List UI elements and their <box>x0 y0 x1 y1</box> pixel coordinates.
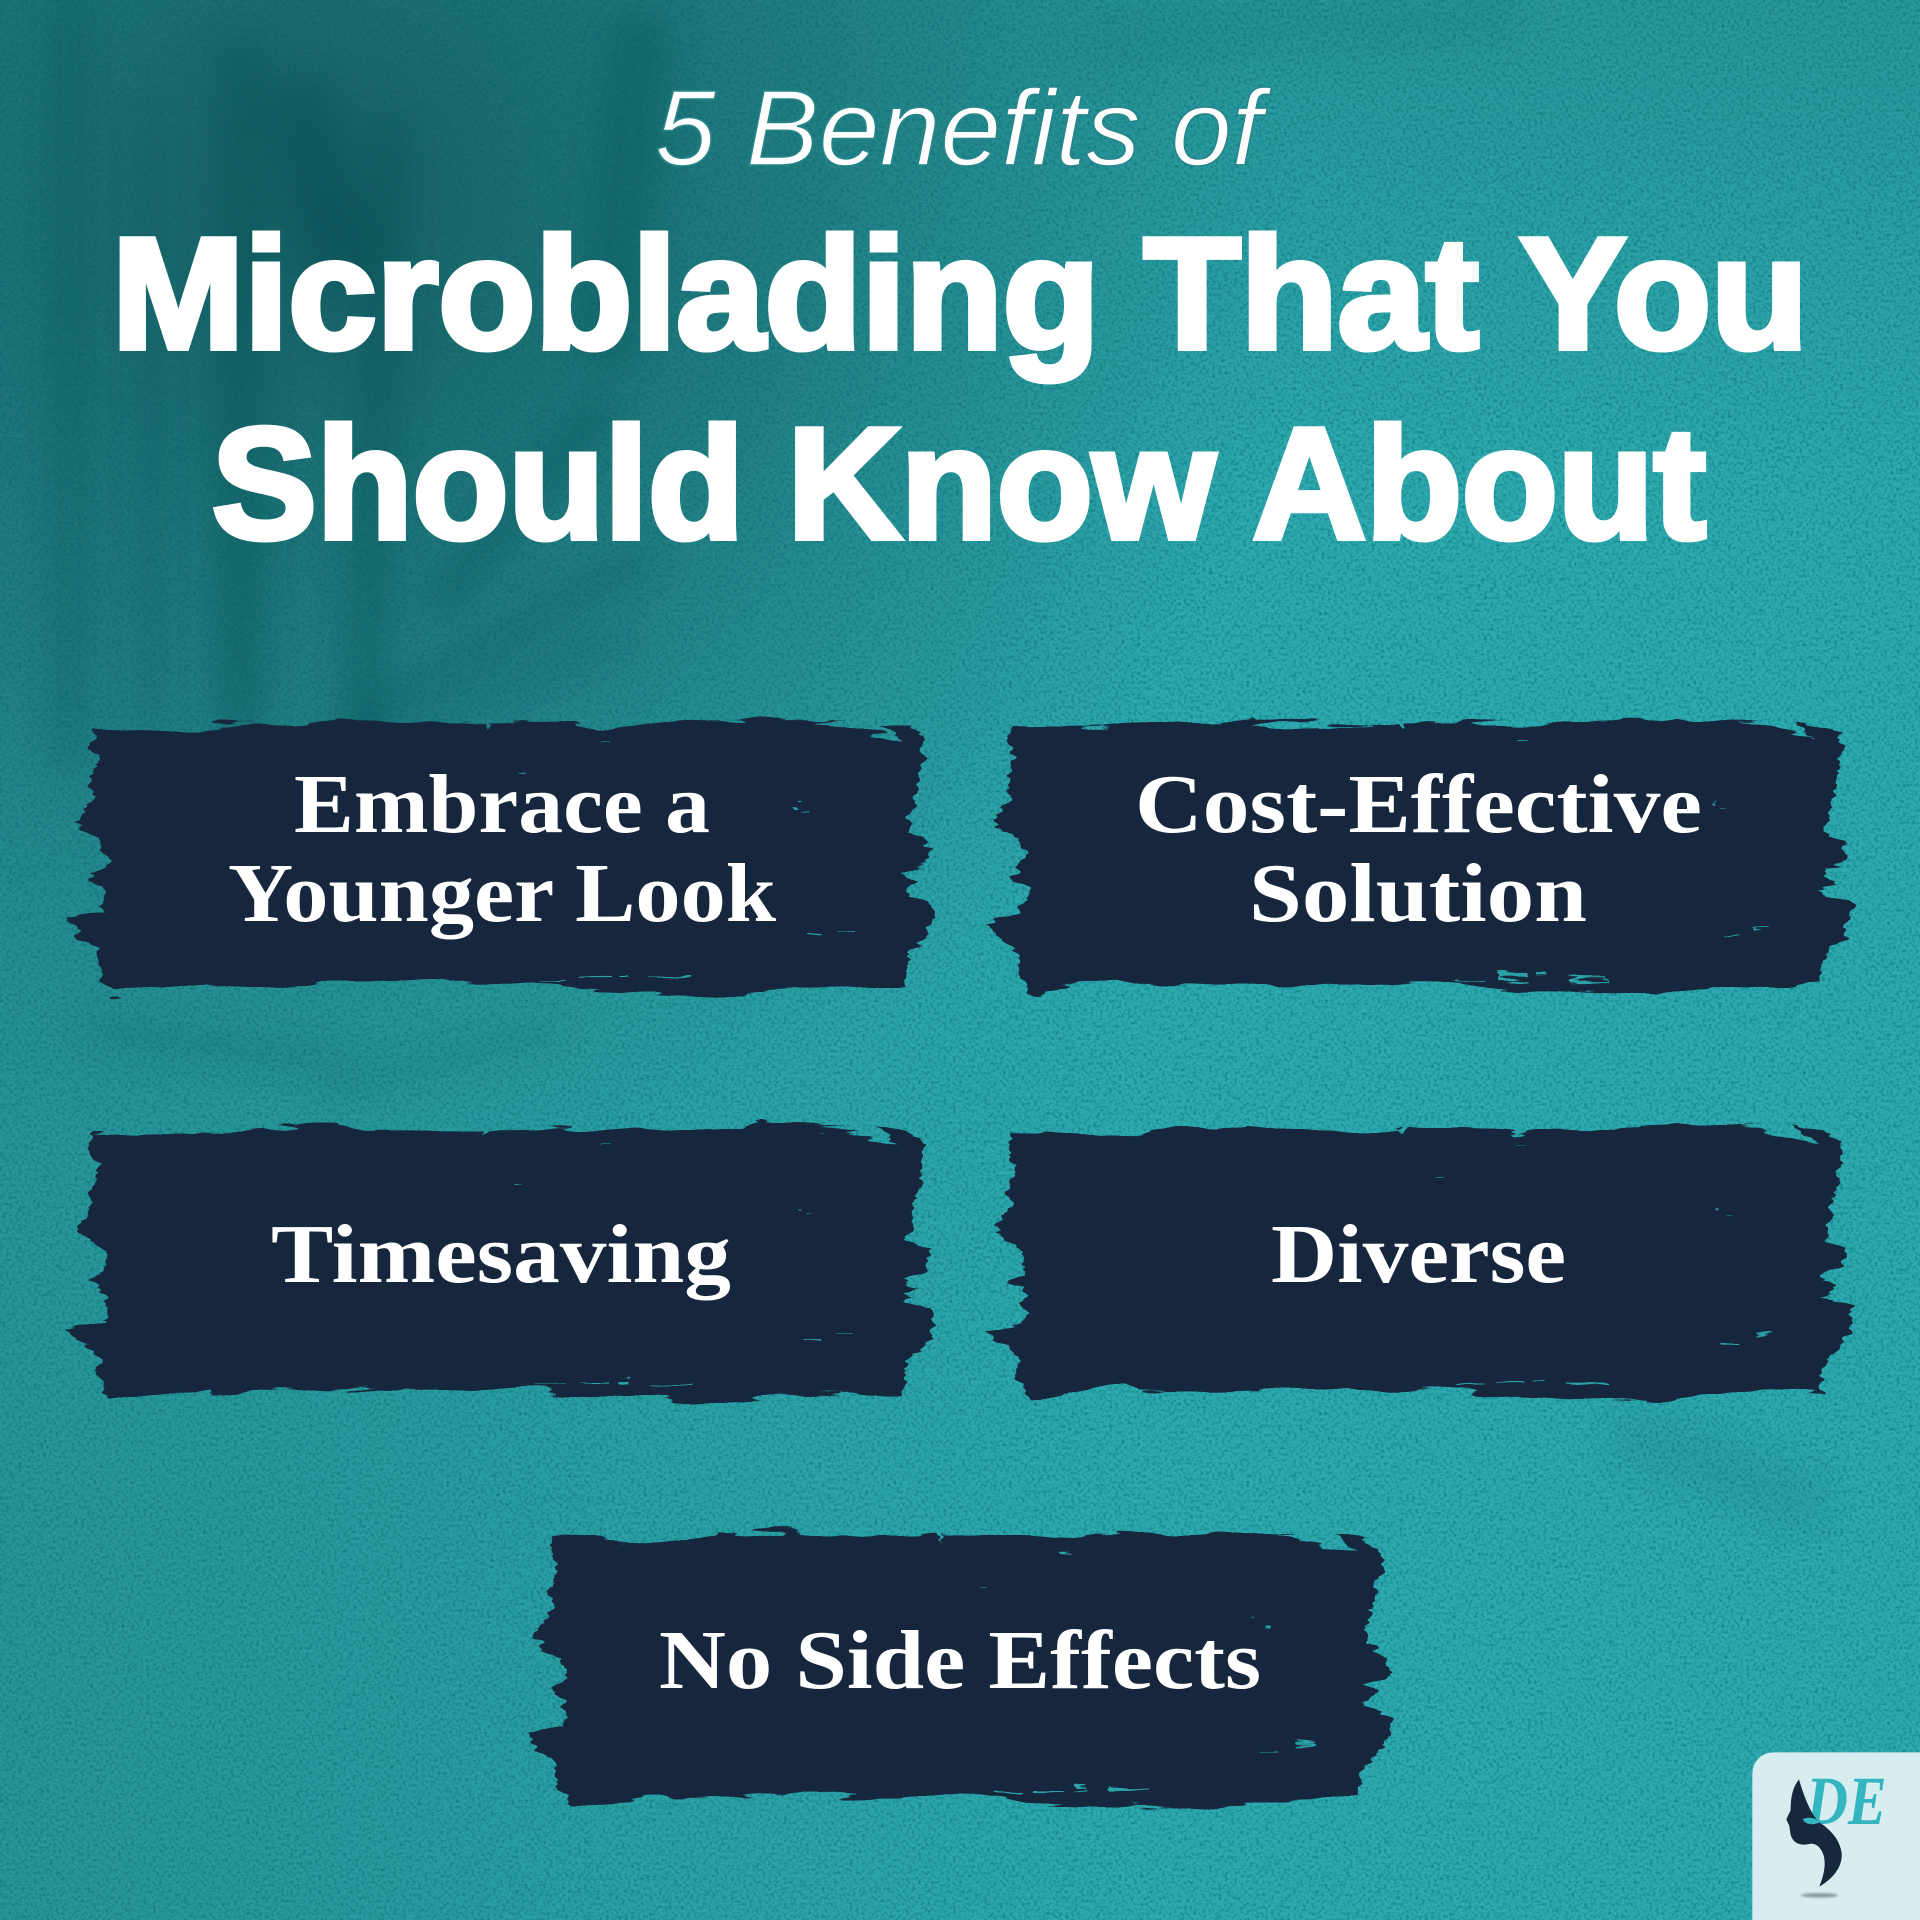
title: Microblading That You Should Know About: Microblading That You <box>112 206 1808 382</box>
panel: Timesaving: Timesaving <box>271 1208 731 1301</box>
panel: Cost-Effective Solution <box>984 717 1853 996</box>
panel: Embrace a Younger Look: Younger Look <box>228 847 776 940</box>
title: Microblading That You Should Know About: Should Know About <box>212 396 1706 572</box>
panel: Embrace a Younger Look: Embrace a <box>294 758 710 851</box>
panel: Embrace a Younger Look <box>66 717 935 996</box>
logo card: DE silhouette: DE <box>1805 1763 1887 1839</box>
subtitle: 5 Benefits of: 5 Benefits of <box>655 67 1272 188</box>
panel: No Side Effects <box>524 1530 1393 1809</box>
panel: Cost-Effective Solution: Cost-Effective <box>1135 758 1702 851</box>
panel: Diverse: Diverse <box>1271 1208 1566 1301</box>
logo card: DE silhouette <box>1752 1752 1920 1920</box>
panel: Timesaving <box>66 1123 935 1402</box>
panel: No Side Effects: No Side Effects <box>659 1614 1261 1707</box>
panel: Cost-Effective Solution: Solution <box>1249 847 1587 940</box>
title: Microblading That You Should Know About <box>112 206 1808 572</box>
panel: Diverse <box>984 1123 1853 1402</box>
